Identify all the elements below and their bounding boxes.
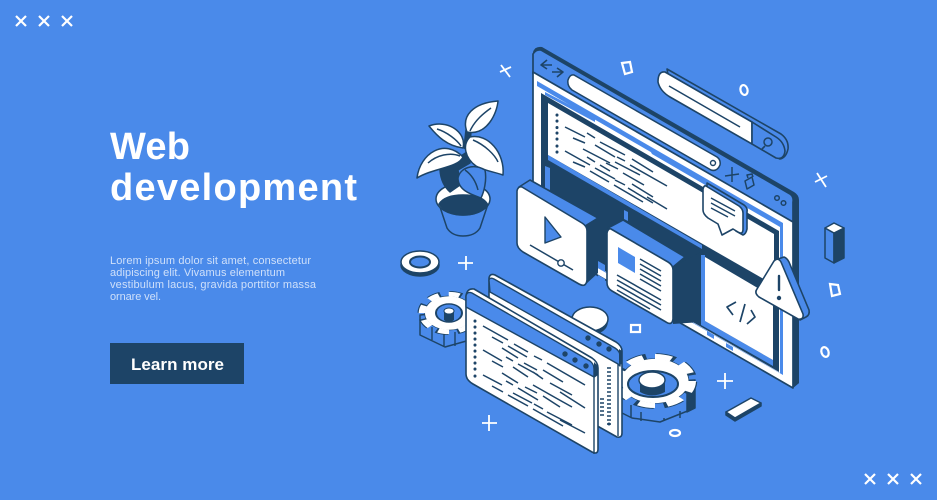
body text: ornare vel. <box>110 291 161 303</box>
small bar block <box>726 398 761 421</box>
list dots <box>474 321 476 376</box>
body text: Lorem ipsum dolor sit amet, consectetur <box>110 255 311 267</box>
stem <box>440 130 471 192</box>
body text <box>110 255 317 303</box>
button: learn more: Learn more <box>131 355 224 374</box>
window body <box>533 47 799 388</box>
list dots <box>556 115 558 152</box>
side code lines <box>600 368 611 424</box>
back small window <box>489 274 622 437</box>
accent dashes <box>545 92 707 186</box>
window title bar <box>533 50 793 224</box>
article card <box>607 220 701 324</box>
decoration: bottom-right crosses <box>865 474 921 484</box>
document on screen <box>548 103 774 285</box>
small connectors between cards <box>598 261 696 321</box>
warning triangle <box>756 257 809 320</box>
title <box>110 126 357 209</box>
round button behind small windows <box>572 307 608 332</box>
body text: adipiscing elit. Vivamus elementum <box>110 267 285 279</box>
white outline shapes <box>622 62 840 436</box>
slider <box>530 245 573 270</box>
button: learn more <box>110 343 244 384</box>
code lines <box>565 127 667 209</box>
small gear <box>420 294 476 347</box>
large gear <box>616 357 695 422</box>
pot <box>437 198 490 236</box>
window frame <box>533 72 793 388</box>
illustration: main browser window <box>533 47 799 388</box>
body text: vestibulum lacus, gravida porttitor massa <box>110 279 317 291</box>
dark screen <box>541 93 779 372</box>
toolbar icons <box>725 167 754 189</box>
address bar <box>568 75 720 170</box>
small box block <box>825 223 844 263</box>
front small window <box>466 289 598 454</box>
code panel <box>701 255 773 366</box>
decoration: top-left crosses <box>16 16 72 26</box>
white plus sparkles <box>458 65 827 431</box>
code symbol <box>727 302 755 324</box>
chat bubble <box>703 183 747 235</box>
plant <box>417 101 503 236</box>
nav arrows <box>541 60 563 77</box>
title: Web <box>110 126 190 168</box>
title bar dots <box>775 196 786 205</box>
leaves <box>465 101 498 132</box>
washer <box>401 251 439 276</box>
code lines <box>483 326 585 433</box>
title: development <box>110 167 357 209</box>
article lines <box>617 259 661 310</box>
play card <box>517 180 598 285</box>
search pill <box>658 69 788 159</box>
magnifier icon <box>764 138 772 146</box>
play icon <box>545 217 561 243</box>
article image <box>618 247 635 273</box>
